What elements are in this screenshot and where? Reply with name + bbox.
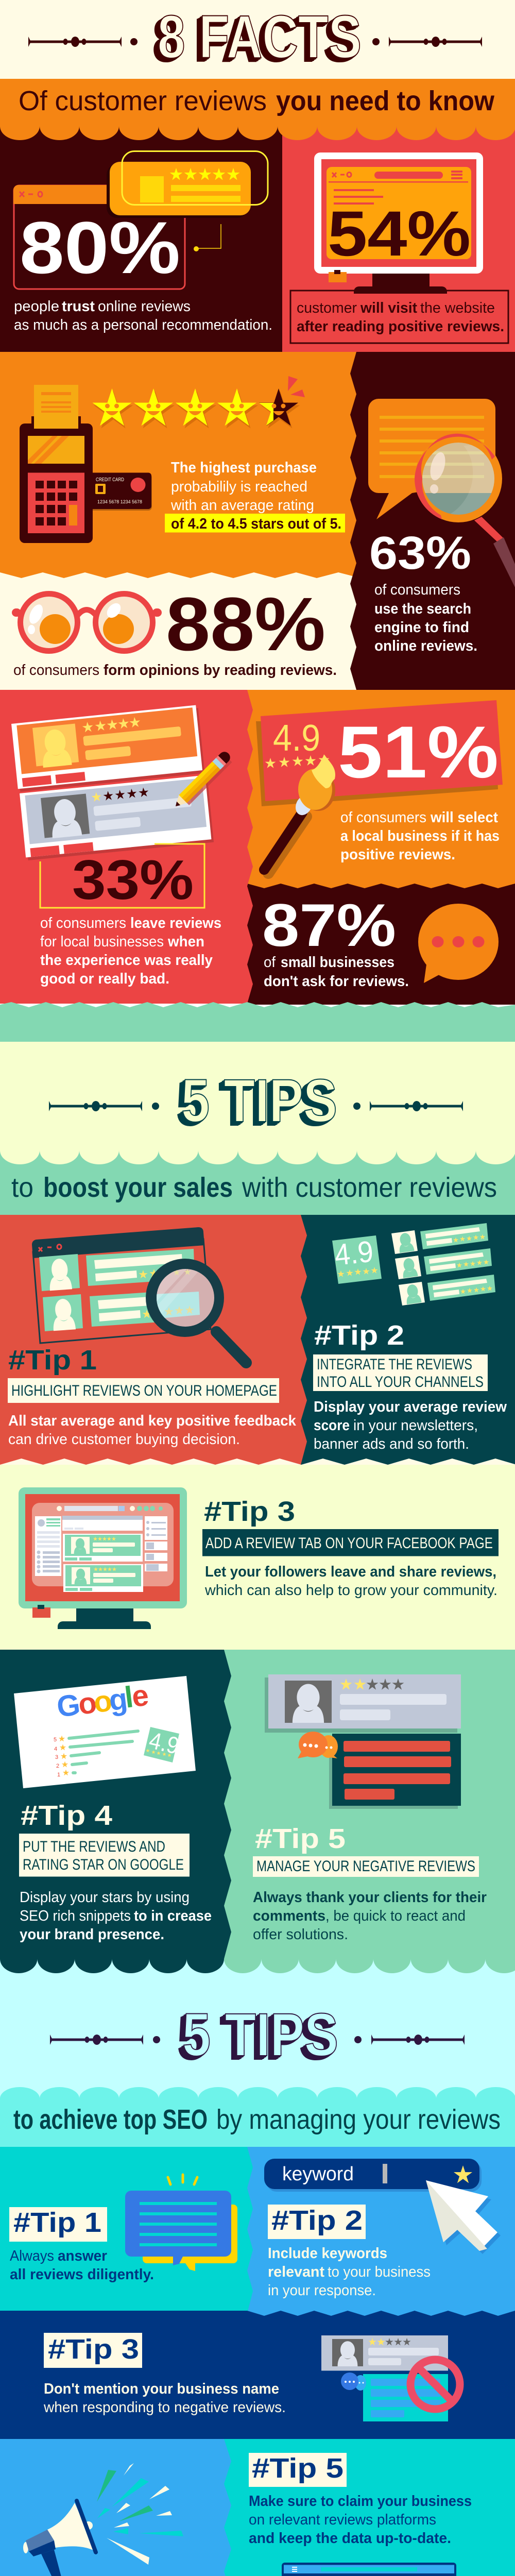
text: tip 4: SEO rich snippets: [20, 1908, 131, 1924]
text: form opinions: form opinions by reading reviews.: [104, 662, 337, 679]
section backgrounds: orange and cream: [0, 352, 356, 579]
panel background: 87% dark: [247, 884, 515, 1005]
icon: google rating card: 1: [57, 1772, 60, 1778]
title: 8 FACTS: [28, 3, 482, 71]
label box: tip 1: HIGHLIGHT REVIEWS ON YOUR HOMEPAGE: [11, 1382, 277, 1399]
icon: arrow cursor: [426, 2180, 501, 2254]
heading: tip 3: #Tip 3: [204, 1496, 295, 1527]
text: 80% description: people: [14, 298, 59, 315]
text: tip 1: [8, 1413, 297, 1448]
title: 5 TIPS: 5 TIPS: [181, 1067, 337, 1135]
heading: tip 4: #Tip 4: [21, 1800, 112, 1831]
icon: keyword search bar: keyword: [282, 2163, 354, 2185]
text: tip 3: Let your followers leave and share reviews,: [205, 1564, 496, 1580]
text: form opinions: of consumers: [13, 662, 99, 679]
text: leave reviews: when: [167, 934, 204, 950]
text: small businesses: [264, 954, 409, 990]
icon: glasses: [12, 591, 162, 654]
number box: 33%: 33%: [72, 849, 194, 911]
text box: 54% description: will visit: [360, 300, 417, 316]
panel background: seo tip 5 turquoise: [224, 2439, 515, 2576]
text: seo tip 1: answer: [58, 2248, 107, 2264]
panel background: tip 3: [0, 1465, 515, 1650]
panel background: tip 5 green: [224, 1650, 515, 1973]
subtitle: you need to know: [276, 86, 495, 116]
label box: tip 4: RATING STAR ON GOOGLE: [23, 1856, 184, 1873]
panel background: glasses cream: [0, 572, 356, 690]
icon: keyword search bar: [264, 2159, 482, 2192]
icon: score and review rows (tip 2): 4.9: [333, 1234, 375, 1272]
text: tip 5: , be quick to react and: [325, 1908, 466, 1924]
heading box: seo tip 5: #Tip 5: [252, 2453, 344, 2484]
text: tip 4: Display your stars by using: [20, 1889, 190, 1906]
text: small businesses: of: [264, 954, 276, 971]
text: 80% description: [14, 298, 272, 333]
text: tip 2: banner ads and so forth.: [314, 1436, 469, 1452]
icon: google rating card: 2: [56, 1763, 59, 1769]
review row 2: [395, 1248, 492, 1279]
browser window: [13, 185, 185, 289]
zigzag edge: [0, 1459, 515, 1465]
panel background: tip 4 dark: [0, 1650, 231, 1973]
text: seo tip 1: all reviews diligently.: [10, 2266, 154, 2283]
text: leave reviews: for local businesses: [40, 934, 164, 950]
google wordmark: [55, 1679, 151, 1724]
label box: tip 1: [8, 1378, 279, 1403]
text: tip 4: to in crease: [134, 1908, 212, 1924]
facebook review card 1: [63, 1534, 143, 1562]
subtitle: boost your sales: to: [11, 1172, 33, 1203]
text: 80% description: as much as a personal recommendation.: [14, 317, 272, 333]
number box: 33%: [40, 844, 204, 911]
heading box: seo tip 2: #Tip 2: [271, 2205, 363, 2236]
icon: google rating card: 4.9: [147, 1726, 182, 1759]
text: highest purchase probability: with an average rating: [170, 497, 314, 514]
icon: paint brush: [264, 755, 335, 873]
icon: rating stars: [92, 376, 305, 428]
panel background: seo tip 3 navy: [0, 2311, 515, 2439]
text: tip 2: in your newsletters,: [353, 1417, 478, 1434]
text: tip 1: All star average and key positive feedback: [8, 1413, 297, 1429]
text: seo tip 2: in your response.: [268, 2282, 376, 2299]
section background: sales tips with scallops: [0, 1042, 515, 1164]
text: small businesses: small businesses: [281, 954, 394, 971]
panel: tilted 51% card: [256, 700, 503, 806]
text: seo tip 1: Always: [10, 2248, 54, 2264]
text: tip 2: score: [314, 1417, 350, 1434]
icon: negative review with reply: [265, 1674, 461, 1809]
text: highest purchase probability: The highest purchase: [171, 460, 317, 476]
heading: tip 5: #Tip 5: [255, 1823, 346, 1854]
title: 8 FACTS: 8 FACTS: [158, 3, 362, 71]
text: tip 5: Always thank your clients for their: [253, 1889, 487, 1906]
teal band behind scallops: [0, 1149, 515, 1215]
text: seo tip 2: [268, 2245, 431, 2299]
text: search engine: engine to find: [374, 619, 469, 636]
text box: 54% description: after reading positive reviews.: [297, 318, 504, 335]
heading: tip 2: #Tip 2: [314, 1320, 404, 1351]
review row 1: [391, 1223, 488, 1254]
icon: business listing panel: [282, 2563, 456, 2576]
title: 5 TIPS SEO: 5 TIPS: [182, 2001, 338, 2069]
icon: monitor with facebook page: [19, 1487, 187, 1629]
text: leave reviews: the experience was really: [40, 952, 213, 969]
title: 5 TIPS: [49, 1067, 463, 1135]
label box: tip 2: INTEGRATE THE REVIEWS: [317, 1356, 472, 1373]
panel: 54% visit website: [290, 152, 508, 343]
text: tip 4: [20, 1889, 212, 1943]
panel background: seo tip 1 turquoise: [0, 2147, 253, 2313]
text: tip 2: [314, 1399, 507, 1452]
text: seo tip 2: Include keywords: [268, 2245, 387, 2262]
icon: browser with magnifier (tip 1): [32, 1227, 246, 1363]
text: seo tip 5: and keep the data up-to-date.: [249, 2530, 451, 2547]
heading: tip 1: #Tip 1: [8, 1345, 97, 1376]
text: search engine: [374, 582, 477, 654]
google wordmark: l: [123, 1680, 135, 1715]
icon: google rating card: 4: [54, 1746, 57, 1752]
text: local business: of consumers: [340, 809, 426, 826]
icon: google rating card: 5: [54, 1737, 57, 1743]
panel background: tip 2 dark: [301, 1215, 515, 1465]
facebook review card 2: [63, 1564, 143, 1592]
panel: tilted 51% card: 4.9: [273, 718, 320, 759]
panel background: tip 1 red: [0, 1215, 309, 1465]
text: local business: positive reviews.: [340, 846, 455, 863]
icon: google rating card: 3: [55, 1754, 58, 1760]
subtitle: Of customer reviews: [19, 86, 267, 116]
text: local business: [340, 809, 500, 863]
teal band: [0, 1002, 515, 1042]
icon: score and review rows (tip 2): [332, 1223, 495, 1306]
label box: tip 2: [313, 1354, 488, 1391]
text: seo tip 3: Don't mention your business name: [44, 2381, 279, 2397]
icon: payment terminal with credit card: 1234 5678 1234 5678: [97, 499, 142, 505]
subtitle band with scallops: [0, 79, 515, 140]
text box: 54% description: customer: [297, 300, 357, 316]
text: tip 3: [204, 1564, 497, 1599]
panel background: 54% red: [282, 126, 515, 352]
review row 3: [399, 1275, 495, 1306]
text: leave reviews: leave reviews: [130, 915, 221, 931]
text: seo tip 5: Make sure to claim your business: [249, 2493, 472, 2510]
title: 5 TIPS SEO: [50, 2001, 465, 2069]
panel: 80% people trust reviews: [13, 151, 272, 333]
text: small businesses: don't ask for reviews.: [264, 973, 409, 990]
text: local business: will select: [430, 809, 498, 826]
text: tip 5: offer solutions.: [253, 1926, 348, 1943]
text: tip 5: [253, 1889, 487, 1943]
text: highest purchase probability: probabilily is reached: [171, 479, 307, 495]
subtitle: boost your sales: [11, 1172, 497, 1203]
text: tip 4: your brand presence.: [20, 1926, 164, 1943]
review card with stars: [107, 151, 268, 218]
icon: speech bubble with magnifier: [368, 399, 515, 587]
icon: google rating card: [14, 1676, 196, 1788]
text: local business: a local business if it has: [340, 828, 500, 844]
label box: tip 4: [19, 1834, 190, 1876]
text: tip 2: Display your average review: [314, 1399, 507, 1415]
text: highest purchase probability: [165, 460, 345, 533]
google wordmark: o: [76, 1686, 98, 1721]
number 54%: 54%: [328, 198, 471, 269]
heading box: seo tip 1: #Tip 1: [13, 2207, 101, 2238]
number 88%: 88%: [166, 582, 325, 667]
subtitle: top SEO: [13, 2104, 501, 2135]
text: leave reviews: of consumers: [40, 915, 126, 931]
panel background: 51% orange: [247, 690, 515, 896]
number 63%: 63%: [369, 528, 471, 579]
card: negative review: [20, 775, 214, 860]
icon: megaphone: [23, 2463, 183, 2576]
panel: tilted 51% card: 51%: [338, 711, 499, 793]
icon: chat bubbles: [125, 2175, 237, 2271]
number 80%: 80%: [20, 207, 180, 289]
number 87%: 87%: [262, 891, 396, 959]
text box: 54% description: the website: [420, 300, 495, 316]
icon: payment terminal with credit card: CREDIT CARD: [96, 477, 124, 483]
text: 80% description: online reviews: [98, 298, 191, 315]
text box: 54% description: [290, 291, 508, 343]
icon: pencil: [171, 750, 235, 812]
icon: review cards with pencil: [11, 705, 235, 860]
text: tip 5: comments: [253, 1908, 325, 1924]
label box: tip 3: [202, 1529, 499, 1556]
icon: payment terminal with credit card: [20, 385, 152, 543]
google wordmark: G: [55, 1688, 82, 1724]
text: leave reviews: [40, 915, 221, 987]
text: search engine: use the search: [374, 601, 471, 617]
google wordmark: o: [92, 1684, 114, 1719]
panel background: 33% red: [0, 690, 253, 1004]
subtitle band: turquoise scallops: [0, 2087, 515, 2147]
google wordmark: e: [130, 1679, 150, 1714]
google wordmark: g: [107, 1682, 129, 1717]
text: search engine: of consumers: [374, 582, 460, 598]
text: seo tip 5: [249, 2493, 472, 2547]
subtitle: [19, 86, 495, 116]
section background: light cyan: [0, 1959, 515, 2576]
section background: facts header: [0, 0, 515, 79]
label box: tip 4: PUT THE REVIEWS AND: [23, 1838, 165, 1855]
text: tip 3: which can also help to grow your community.: [204, 1582, 497, 1599]
text: seo tip 2: to your business: [328, 2264, 431, 2280]
card: positive review: [11, 705, 205, 792]
panel background: seo tip 2 blue: [247, 2147, 515, 2316]
connector line: [194, 224, 221, 251]
subtitle: top SEO: to achieve top SEO: [13, 2104, 208, 2135]
icon: speech bubble dots: [418, 904, 499, 983]
text: 80% description: trust: [62, 298, 95, 315]
text: search engine: online reviews.: [374, 638, 477, 654]
heading box: seo tip 3: #Tip 3: [48, 2334, 139, 2365]
text: seo tip 1: [10, 2248, 154, 2283]
text: seo tip 2: relevant: [268, 2264, 324, 2280]
text: seo tip 3: when responding to negative reviews.: [43, 2399, 286, 2416]
panel background: 63% dark: [350, 352, 515, 690]
subtitle: boost your sales: with customer reviews: [242, 1172, 497, 1203]
icon: review with prohibited sign: [321, 2335, 460, 2421]
panel background: seo tip 4 blue: [0, 2439, 231, 2576]
text: highest purchase probability: of 4.2 to 4.5 stars out of 5.: [171, 516, 341, 532]
monitor: [314, 152, 483, 294]
text: seo tip 3: [43, 2381, 286, 2416]
label box: tip 2: INTO ALL YOUR CHANNELS: [317, 1374, 484, 1391]
text: tip 1: can drive customer buying decision.: [8, 1431, 240, 1448]
text: leave reviews: good or really bad.: [40, 971, 169, 987]
subtitle: boost your sales: boost your sales: [43, 1172, 233, 1203]
text: seo tip 5: on relevant reviews platforms: [249, 2512, 436, 2528]
panel background: 80% dark: [0, 126, 282, 352]
